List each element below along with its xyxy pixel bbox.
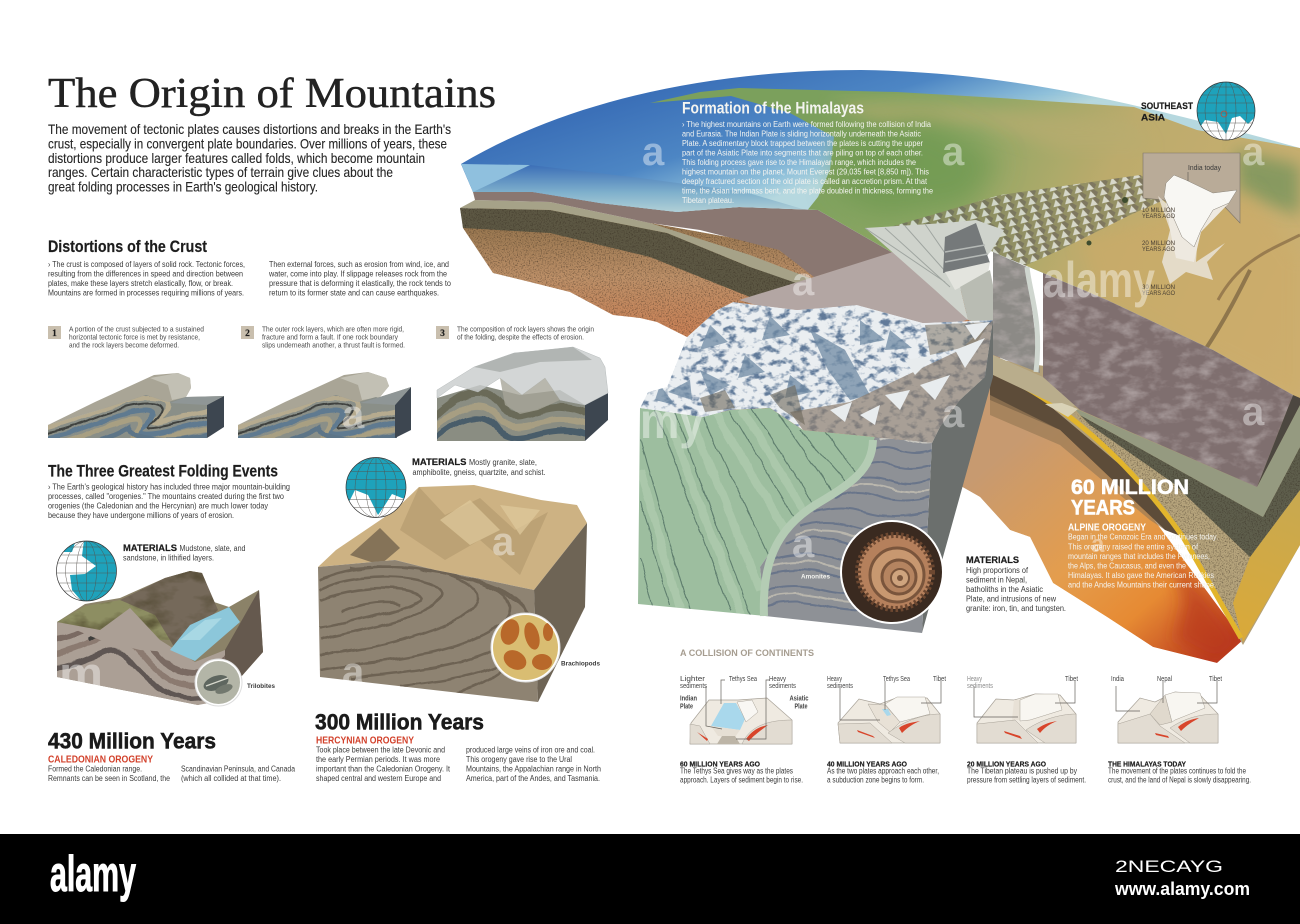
caption: 20 million years ago: 20 MILLION YEARS AGO [967, 760, 1046, 768]
materials: caledonian: sandstone, in lithified layers. [123, 554, 214, 562]
step 3 caption: The composition of rock layers shows the origin [457, 326, 594, 334]
diagram: 40 million years ago: Tibet [933, 676, 946, 683]
wavy band [993, 252, 1040, 373]
fold diagram 2 [238, 372, 411, 445]
text block: caledonian: Remnants can be seen in Scotland, the [48, 774, 170, 783]
text block: alpine: Began in the Cenozoic Era and continues today. [1068, 532, 1218, 542]
land mass [650, 88, 1300, 400]
translucent crust section [739, 252, 972, 335]
text block: crust column 2: Then external forces, such as erosion from wind, ice, and [269, 260, 449, 269]
footer bar: alamy [50, 846, 136, 902]
block: caledonian landscape [50, 571, 263, 705]
text block: hercynian [316, 746, 601, 783]
watermark overlays: m [59, 651, 103, 695]
materials: himalayas: granite: iron, tin, and tungsten. [966, 604, 1066, 613]
inset map: india drift [1142, 153, 1240, 297]
text block: crust column 2: pressure that is deforming it elastically, the rock tends to [269, 279, 452, 288]
diagram: 20 million years ago: sediments [967, 683, 993, 690]
intro paragraph: great folding processes in Earth's geological history. [48, 178, 318, 194]
subheading: hercynian orogeny: HERCYNIAN OROGENY [316, 736, 414, 746]
footer bar: 2NECAYG [1115, 858, 1223, 876]
text block: himalayas: part of the Asiatic Plate into segments that are piling on top of each other. [682, 148, 923, 158]
diagram: 60 million years ago: Indian [680, 696, 697, 702]
hero: earth cutaway [440, 60, 1300, 663]
text block: crust column 1: Mountains are formed in processes requiring millions of years. [48, 288, 244, 298]
diagram: the himalayas today [1111, 676, 1222, 743]
label: ammonites: Amonites [801, 574, 830, 580]
text block: caledonian: Formed the Caledonian range. [48, 764, 142, 774]
base of right layers [1000, 360, 1300, 645]
inset map: india drift: 20 MILLION [1142, 240, 1175, 247]
intro paragraph: crust, especially in convergent plate boundaries. Over millions of years, these [48, 136, 447, 152]
text block: alpine [1068, 532, 1218, 590]
dark band, right [990, 372, 1183, 537]
watermark overlays: a [792, 260, 815, 304]
watermark overlays: a [492, 520, 515, 564]
label: trilobites: Trilobites [247, 683, 275, 690]
text block: himalayas: highest mountain on the planet, Mount Everest (29,035 feet [8,850 m]). This [682, 168, 929, 176]
inset map: india drift: YEARS AGO [1142, 246, 1175, 253]
heading: distortions of the crust: Distortions of the Crust [48, 237, 207, 256]
text block: himalayas: time, the Asian landmass bent, and the plate doubled in thickness, forming the [682, 186, 933, 196]
text block: caledonian: Scandinavian Peninsula, and Canada [181, 764, 295, 774]
diagram: 40 million years ago: sediments [827, 683, 853, 690]
caption: 60 million years ago: The Tethys Sea gives way as the plates [680, 766, 793, 776]
stat: 300 million years: 300 Million Years [315, 710, 484, 734]
text block: caledonian [48, 764, 295, 783]
text block: crust column 2 [268, 260, 452, 298]
caption: 60 million years ago: 60 MILLION YEARS AGO [680, 760, 760, 768]
diagram: 60 million years ago: sediments [769, 683, 796, 690]
subheading: caledonian orogeny: CALEDONIAN OROGENY [48, 754, 153, 766]
tan band right of the yellow line [1060, 400, 1250, 640]
stat: 60 million years: YEARS [1071, 496, 1135, 520]
materials: himalayas [966, 555, 1066, 613]
dappled snow zone [892, 175, 1164, 266]
intro paragraph: ranges. Certain characteristic types of terrain give clues about the [48, 164, 393, 180]
materials: hercynian: MATERIALS [412, 457, 466, 468]
left dark band [460, 208, 820, 300]
heading: formation of the himalayas: Formation of the Himalayas [682, 98, 864, 118]
footer bar [0, 834, 1300, 924]
text block: folding events: orogenies (the Caledonian and the Hercynian) are much lower today [48, 502, 268, 510]
diagram: 20 million years ago: Tibet [1065, 676, 1078, 683]
materials: caledonian [123, 543, 246, 562]
step 3 caption: of the folding, despite the effects of erosion. [457, 334, 584, 342]
label: southeast asia [1141, 101, 1193, 124]
watermark overlays [59, 130, 1265, 695]
subheading: alpine orogeny: ALPINE OROGENY [1068, 522, 1146, 534]
step 3 caption [436, 326, 594, 342]
watermark overlays: a [342, 650, 365, 694]
materials: hercynian: amphibolite, gneiss, quartzite, and schist. [412, 468, 546, 477]
diagram: 40 million years ago: Heavy [827, 676, 842, 683]
text block: himalayas: This folding process gave rise to the Himalayan range, which includes the [682, 158, 916, 167]
watermark overlays: alamy [1043, 252, 1155, 308]
front block: himalaya section [638, 302, 993, 633]
diagram: 60 million years ago [680, 676, 809, 744]
text block: himalayas: › The highest mountains on Earth were formed following the collision of India [682, 120, 932, 129]
deep orange mantle, right [962, 388, 1241, 663]
text block: alpine: the Alps, the Caucasus, and even the [1068, 562, 1186, 570]
accretion fan [865, 220, 1004, 320]
text block: crust column 2: return to its former state and can cause earthquakes. [269, 288, 439, 298]
diagram: 20 million years ago [967, 676, 1078, 743]
caption: 20 million years ago: The Tibetan plateau is pushed up by [967, 766, 1077, 776]
left purple band [473, 192, 893, 277]
caption: 60 million years ago [680, 760, 803, 784]
watermark overlays: a [942, 392, 965, 436]
sea surface and land [440, 60, 1300, 410]
diagram: 20 million years ago: Heavy [967, 676, 982, 683]
materials: himalayas: MATERIALS [966, 555, 1019, 566]
step 2 caption: The outer rock layers, which are often more rigid, [262, 326, 404, 334]
text block: crust column 1: plates, make these layers stretch elastically, flow, or break. [48, 279, 233, 288]
text block: alpine: mountain ranges that includes the Pyrenees, [1068, 552, 1210, 561]
text block: folding events [48, 482, 290, 520]
text block: himalayas: deeply fractured section of the old plate is called an accretion prism. At that [682, 177, 928, 186]
text block: crust column 2: water, come into play. If slippage releases rock from the [268, 270, 447, 278]
front block side face [922, 320, 993, 633]
text block: himalayas [682, 120, 933, 205]
materials: himalayas: batholiths in the Asiatic [966, 585, 1043, 594]
diagram: 60 million years ago: Tethys Sea [729, 676, 757, 683]
river [764, 440, 873, 616]
globe: southeast asia [1196, 80, 1256, 141]
text block: hercynian: produced large veins of iron ore and coal. [466, 746, 595, 754]
text block: hercynian: the early Permian periods. It was more [316, 755, 440, 764]
text block: alpine: and the Andes Mountains their current shape. [1068, 580, 1216, 590]
stat: 60 million years [1071, 476, 1189, 520]
caption: 60 million years ago: approach. Layers of sediment begin to rise. [680, 776, 803, 784]
caption: 40 million years ago: As the two plates approach each other, [827, 766, 939, 776]
white river [1027, 267, 1038, 372]
caption: 40 million years ago [827, 760, 939, 784]
diagram: 60 million years ago: Asiatic [790, 696, 809, 702]
gold plate [1233, 490, 1300, 642]
diagram: the himalayas today: Tibet [1209, 676, 1222, 683]
watermark overlays: a [792, 522, 815, 566]
label: brachiopods: Brachiopods [561, 660, 600, 668]
diagram: 60 million years ago: Plate [680, 704, 693, 710]
watermark overlays: my [640, 393, 704, 449]
diagram: the himalayas today: India [1111, 676, 1124, 683]
diagram: 60 million years ago: Heavy [769, 676, 786, 683]
caption: the himalayas today: crust, and the land of Nepal is slowly disappearing. [1108, 776, 1251, 784]
left green-grey band [460, 200, 825, 292]
caption: the himalayas today: THE HIMALAYAS TODAY [1108, 760, 1186, 768]
text block: himalayas: Plate. A sedimentary block trapped between the plates is cutting the upper [682, 139, 923, 148]
text block: himalayas: and Eurasia. The Indian Plate is sliding horizontally underneath the Asiatic [682, 130, 921, 138]
text block: folding events: because they have undergone millions of years of erosion. [48, 511, 234, 520]
inset map: india drift: India today [1188, 165, 1221, 172]
label: southeast asia: SOUTHEAST [1141, 101, 1193, 112]
fossil circle: trilobites [195, 659, 242, 706]
text block: hercynian: shaped central and western Europe and [316, 774, 441, 783]
text block: caledonian: (which all collided at that time). [181, 774, 281, 783]
inset map: india drift: YEARS AGO [1142, 213, 1175, 220]
materials: hercynian [412, 457, 546, 477]
inset map: india drift: 10 MILLION [1142, 207, 1175, 214]
label: southeast asia: ASIA [1141, 112, 1165, 124]
heading: a collision of continents: A COLLISION OF CONTINENTS [680, 648, 814, 659]
caption: the himalayas today: The movement of the plates continues to fold the [1108, 766, 1246, 776]
caption: 20 million years ago [967, 760, 1086, 784]
right purple rock block [1043, 273, 1293, 487]
globe: europe [56, 540, 120, 605]
grey green band [1074, 405, 1300, 517]
step 2 caption: fracture and form a fault. If one rock boundary [262, 334, 398, 342]
fold diagram 1 [48, 373, 224, 445]
materials: himalayas: sediment in Nepal, [966, 576, 1027, 584]
intro paragraph: distortions produce larger features called folds, which become mountain [48, 150, 425, 166]
front block green rock face [638, 408, 875, 616]
text block: hercynian: America, part of the Andes, and Tasmania. [466, 774, 600, 783]
deep orange mantle, left [461, 205, 1000, 500]
caption: 40 million years ago: 40 MILLION YEARS AGO [827, 760, 907, 768]
watermark overlays: a [342, 393, 365, 437]
text block: hercynian: This orogeny gave rise to the Ural [466, 755, 572, 764]
stat: 430 million years: 430 Million Years [48, 728, 216, 754]
watermark overlays: a [942, 130, 965, 174]
caption: the himalayas today [1108, 760, 1251, 784]
diagram: the himalayas today: Nepal [1157, 676, 1172, 683]
caption: 20 million years ago: pressure from settling layers of sediment. [967, 776, 1086, 784]
intro paragraph: The movement of tectonic plates causes distortions and breaks in the Earth's [48, 121, 451, 137]
step 2 caption: 2 [245, 329, 250, 339]
dark grey band [1080, 415, 1300, 557]
stat: 60 million years: 60 MILLION [1071, 476, 1189, 499]
fold diagram 3 [430, 347, 608, 441]
inset map: india drift: 30 MILLION [1142, 284, 1175, 291]
step 1 caption: and the rock layers become deformed. [69, 342, 179, 350]
text block: crust column 1: › The crust is composed of layers of solid rock. Tectonic forces, [48, 260, 245, 269]
title: The Origin of Mountains [48, 71, 496, 117]
text block: folding events: processes, called "orogenies." The mountains created during the first two [48, 492, 284, 501]
diagram: 60 million years ago: Lighter [680, 676, 706, 683]
materials: himalayas: High proportions of [966, 566, 1029, 575]
diagram: 40 million years ago [827, 676, 946, 743]
text block: himalayas: Tibetan plateau. [682, 196, 734, 205]
step 1 caption: A portion of the crust subjected to a sustained [69, 326, 204, 334]
footer bar: www.alamy.com [1114, 879, 1250, 899]
materials: himalayas: Plate, and intrusions of new [966, 594, 1056, 604]
cream layer [993, 355, 1075, 412]
text block: alpine: This orogeny raised the entire system of [1068, 542, 1199, 552]
watermark overlays: a [642, 130, 665, 174]
diagram: 60 million years ago: sediments [680, 683, 707, 690]
step 1 caption [48, 326, 204, 350]
step 2 caption [241, 326, 405, 350]
front block grey wavy face [760, 437, 932, 633]
text block: hercynian: Mountains, the Appalachian range in North [466, 764, 601, 774]
step 1 caption: horizontal tectonic force is met by resistance, [69, 334, 200, 342]
fossil circle: brachiopods [491, 613, 560, 682]
watermark overlays: a [1242, 390, 1265, 434]
globe: asia, hercynian [345, 457, 407, 518]
text block: crust column 1 [48, 260, 245, 298]
caption: 40 million years ago: a subduction zone begins to form. [827, 776, 924, 784]
diagram: 40 million years ago: Tethys Sea [883, 676, 910, 683]
materials: caledonian: Mudstone, slate, and [180, 544, 246, 553]
heading: three greatest folding events: The Three Greatest Folding Events [48, 462, 278, 480]
text block: crust column 1: resulting from the differences in speed and direction between [48, 270, 243, 278]
step 1 caption: 1 [52, 329, 57, 339]
materials: caledonian: MATERIALS [123, 543, 177, 554]
diagram: 60 million years ago: Plate [794, 704, 808, 710]
text block: hercynian: important than the Caledonian Orogeny. It [316, 764, 451, 774]
block: hercynian landscape [318, 485, 587, 702]
yellow line [1023, 386, 1241, 638]
inset map: india drift: YEARS AGO [1142, 290, 1175, 297]
text block: folding events: › The Earth's geological history has included three major mountain-building [48, 482, 290, 492]
snowy mountains [640, 302, 993, 443]
intro paragraph [48, 121, 451, 194]
text block: hercynian: Took place between the late Devonic and [316, 746, 445, 754]
step 3 caption: 3 [440, 329, 445, 339]
text block: alpine: Himalayas. It also gave the American Rockies [1068, 571, 1214, 580]
step 2 caption: slips underneath another, a thrust fault is formed. [262, 342, 405, 350]
watermark overlays: a [1091, 531, 1105, 558]
ammonite fossil [840, 520, 944, 624]
materials: hercynian: Mostly granite, slate, [469, 458, 537, 467]
watermark overlays: a [1242, 130, 1265, 174]
